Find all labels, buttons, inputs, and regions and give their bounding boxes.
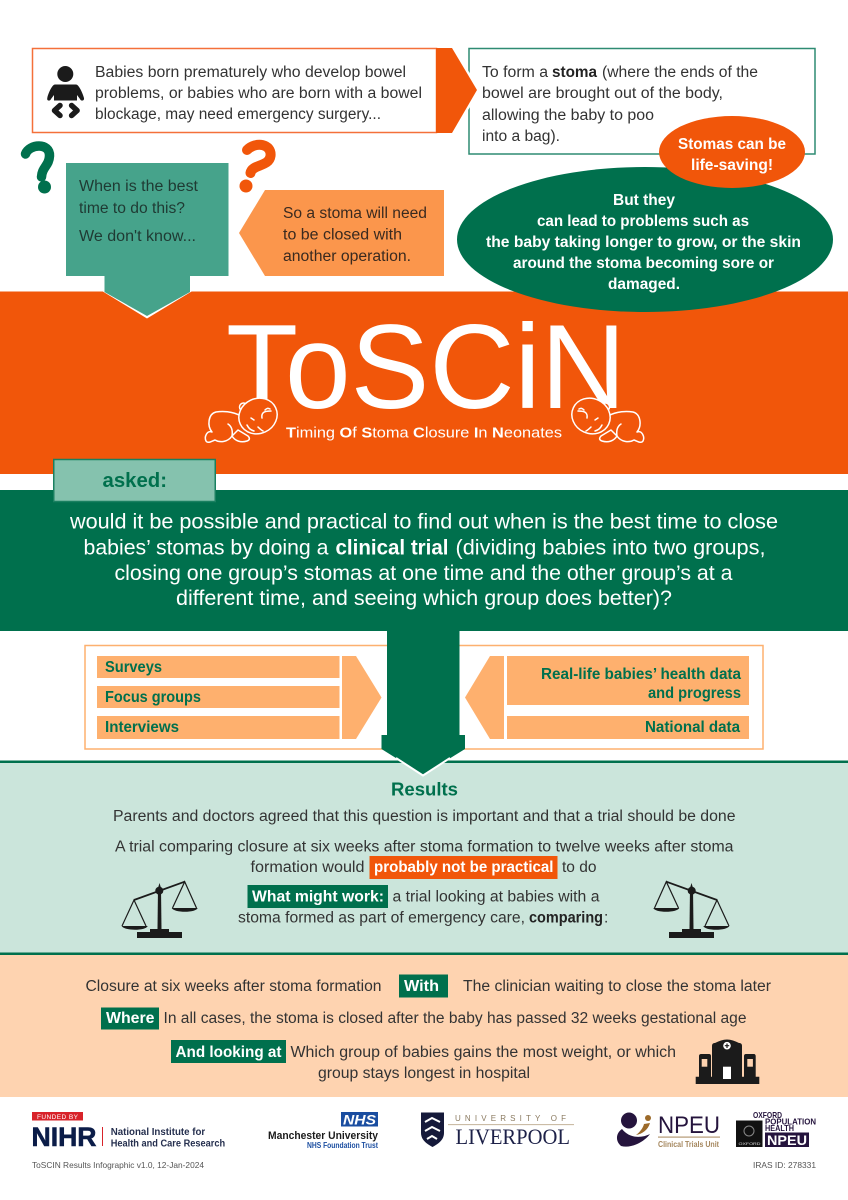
data: real-life babies: and progress (648, 685, 741, 702)
text: closure with clinician waiting: Closure at six weeks after stoma formation (86, 978, 382, 995)
logo: University of Liverpool: UNIVERSITY OF (455, 1114, 566, 1123)
icon: green question mark (26, 146, 51, 194)
text: agreement: Parents and doctors agreed that this question is important and that a trial should be done (113, 808, 736, 825)
panel: second explanation box about stoma: (where the ends of the (602, 64, 758, 81)
panel: results (0, 760, 848, 955)
text: what might work: : (604, 910, 608, 926)
panel: second explanation box about stoma: into a bag). (482, 128, 560, 145)
panel: green research question band: babies’ stomas by doing a (84, 536, 329, 560)
subtitle: Timing Of Stoma Closure In Neonates (286, 426, 562, 442)
arrow: central green down arrow (382, 631, 465, 775)
text: and looking at (171, 1040, 676, 1082)
text: closure with clinician waiting (86, 974, 771, 998)
panel: trial comparison (0, 955, 848, 1097)
icon: baby (47, 66, 84, 116)
panel: green research question band: (dividing babies into two groups, (456, 536, 766, 560)
logo: NIHR (32, 1112, 225, 1152)
method: surveys (97, 656, 340, 678)
panel: green problems ellipse: can lead to problems such as (537, 213, 749, 230)
data: real-life babies (507, 656, 749, 705)
logo: NIHR: NIHR (32, 1122, 96, 1152)
panel: second explanation box about stoma: stoma (552, 64, 597, 81)
panel: second explanation box about stoma (469, 48, 815, 154)
panel: green research question band: closing one group’s stomas at one time and the other group’s at a (114, 562, 733, 585)
panel: green research question band: would it be possible and practical to find out when is the best time to close (69, 510, 778, 534)
method: surveys: Surveys (105, 659, 162, 676)
panel: teal question box with arrow: time to do this? (79, 200, 185, 217)
footer: version text: ToSCIN Results Infographic v1.0, 12-Jan-2024 (32, 1160, 204, 1170)
logo: NPEU Clinical Trials Unit: NPEU (658, 1112, 720, 1139)
method: interviews: Interviews (105, 719, 179, 736)
text: six versus twelve weeks (115, 838, 734, 879)
panel: green problems ellipse: the baby taking longer to grow, or the skin (486, 234, 801, 251)
icon: sleeping baby right (566, 392, 644, 442)
panel: second explanation box about stoma: bowel are brought out of the body, (482, 85, 723, 102)
panel: green problems ellipse: But they (613, 192, 675, 209)
logo: Oxford Population Health NPEU: HEALTH (765, 1123, 794, 1133)
text: what might work: a trial looking at babies with a (392, 888, 600, 906)
title: ToSCiN (226, 300, 626, 434)
panel: green problems ellipse: damaged. (608, 276, 680, 293)
panel: green problems ellipse: around the stoma becoming sore or (513, 255, 774, 272)
panel: teal question box with arrow: We don't know... (79, 228, 196, 245)
panel: first explanation box about emergency surgery: problems, or babies who are born with a bowel (95, 85, 422, 102)
panel: first explanation box about emergency surgery (32, 48, 436, 132)
method: focus groups: Focus groups (105, 689, 201, 706)
logo: Oxford Population Health NPEU: POPULATION (765, 1116, 816, 1126)
method: focus groups (97, 686, 340, 708)
text: where: In all cases, the stoma is closed after the baby has passed 32 weeks gestational age (164, 1010, 746, 1027)
panel: green research question band: different time, and seeing which group does better)? (176, 587, 672, 610)
logo: Manchester University NHS (268, 1112, 379, 1150)
panel: first explanation box about emergency surgery: Babies born prematurely who develop bowel (95, 64, 406, 81)
arrow: right data into centre (465, 656, 504, 739)
data: national data (507, 716, 749, 739)
heading: results: Results (391, 778, 458, 800)
panel: first explanation box about emergency surgery: blockage, may need emergency surgery... (95, 106, 381, 123)
text: six versus twelve weeks: to do (562, 859, 596, 876)
logo: Oxford Population Health NPEU: OXFORD (738, 1142, 761, 1146)
panel: teal question box with arrow: When is the best (79, 178, 199, 195)
text: six versus twelve weeks: A trial comparing closure at six weeks after stoma formation to twelve weeks after stoma (115, 838, 734, 856)
logo: Manchester University NHS: NHS (343, 1112, 377, 1128)
arrow outline: white chevron (396, 758, 450, 776)
text: where: Where (106, 1010, 155, 1027)
logo: NIHR: FUNDED BY (37, 1114, 79, 1121)
logo: NPEU Clinical Trials Unit: Clinical Trials Unit (658, 1139, 719, 1149)
panel: green research question band: clinical trial (336, 536, 448, 560)
heading: asked tab (54, 460, 215, 502)
panel: green research question band (0, 490, 848, 631)
data: real-life babies: Real-life babies’ health data (541, 666, 741, 683)
logo: University of Liverpool (421, 1112, 574, 1149)
text: where (101, 1008, 746, 1030)
text: and looking at: And looking at (176, 1044, 282, 1061)
text: what might work (238, 885, 608, 926)
panel: green problems ellipse (457, 167, 833, 312)
logo: NIHR: Health and Care Research (111, 1138, 225, 1150)
icon: orange question mark (240, 145, 271, 192)
logo: NIHR: National Institute for (111, 1127, 205, 1138)
callout: stomas can be life-saving: life-saving! (691, 157, 773, 174)
logo: Manchester University NHS: Manchester University (268, 1130, 379, 1142)
text: what might work: stoma formed as part of emergency care, (238, 910, 525, 926)
logo: Oxford Population Health NPEU (736, 1110, 816, 1148)
panel: second explanation box about stoma: allowing the baby to poo (482, 107, 654, 124)
text: closure with clinician waiting: The clinician waiting to close the stoma later (463, 978, 771, 995)
panel: orange callout about closing stoma (239, 190, 444, 276)
icon: scales right (653, 882, 729, 938)
panel: teal question box with arrow (66, 163, 228, 317)
text: and looking at: Which group of babies gains the most weight, or which (290, 1044, 676, 1061)
text: and looking at: group stays longest in hospital (318, 1065, 530, 1082)
footer: IRAS ID: IRAS ID: 278331 (753, 1160, 816, 1170)
text: what might work: comparing (529, 910, 603, 926)
icon: hospital (696, 1040, 759, 1084)
arrow: left methods into centre (342, 656, 382, 739)
text: what might work: What might work: (252, 888, 384, 906)
text: closure with clinician waiting: With (404, 978, 439, 995)
logo: University of Liverpool: LIVERPOOL (456, 1124, 570, 1149)
logo: Oxford Population Health NPEU: OXFORD (753, 1110, 782, 1120)
heading: asked tab: asked: (102, 470, 167, 492)
arrow: from surgery to stoma (436, 48, 478, 133)
panel: orange callout about closing stoma: another operation. (283, 248, 411, 265)
panel: orange callout about closing stoma: So a stoma will need (283, 205, 427, 222)
panel: methods frame (85, 646, 763, 749)
text: six versus twelve weeks: formation would (250, 859, 364, 876)
data: national data: National data (645, 719, 740, 736)
icon: scales left (122, 882, 198, 938)
panel: orange title band (0, 292, 848, 474)
logo: NPEU Clinical Trials Unit (617, 1112, 720, 1149)
logo: Oxford Population Health NPEU: NPEU (767, 1132, 807, 1148)
callout: stomas can be life-saving: Stomas can be (678, 136, 786, 153)
panel: orange callout about closing stoma: to be closed with (283, 226, 402, 244)
text: six versus twelve weeks: probably not be practical (374, 859, 554, 876)
logo: Manchester University NHS: NHS Foundation Trust (307, 1141, 378, 1150)
method: interviews (97, 716, 340, 739)
callout: stomas can be life-saving (659, 116, 805, 188)
panel: second explanation box about stoma: To form a (482, 64, 548, 81)
icon: sleeping baby left (205, 392, 283, 442)
